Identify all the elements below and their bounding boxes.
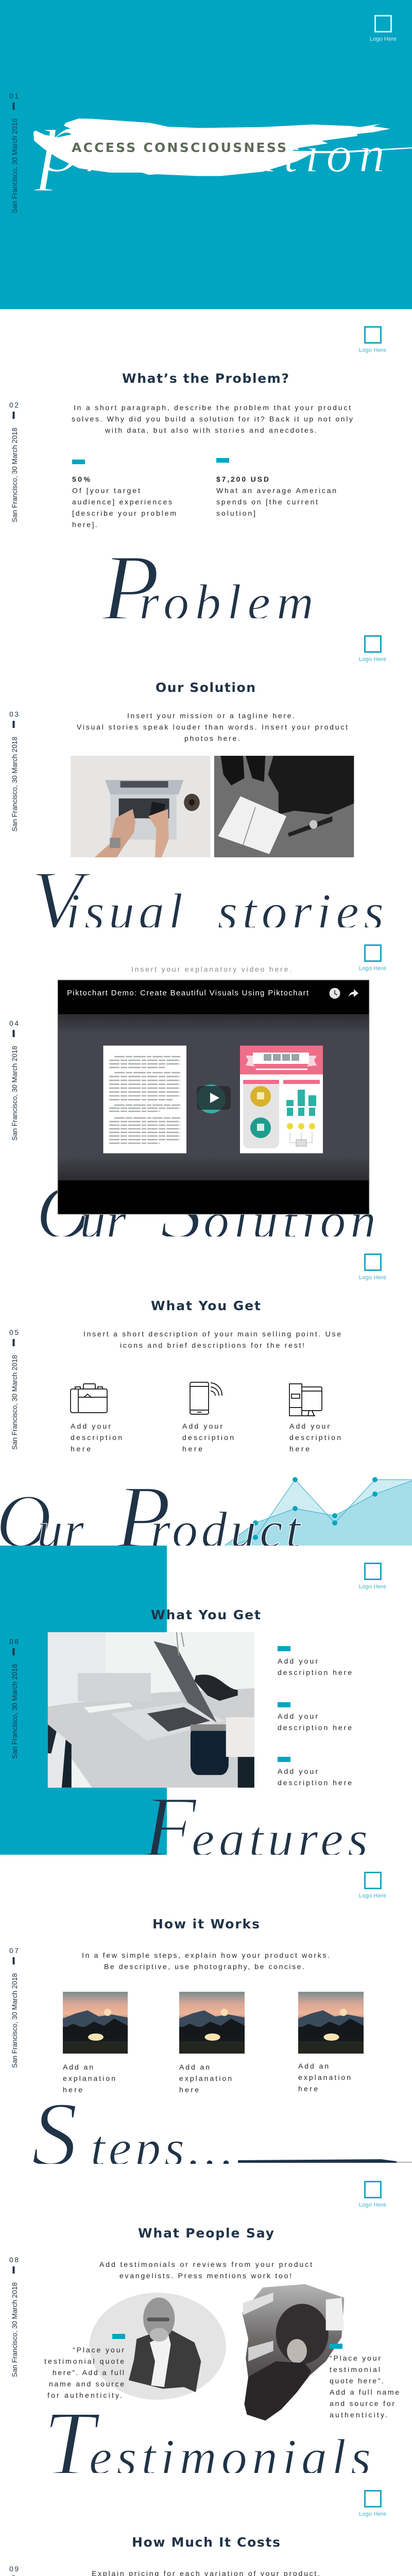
logo placeholder: Logo Here: [359, 347, 386, 353]
section marker: San Francisco, 30 March 2018: [11, 1355, 19, 1450]
stat: 50%: here].: [72, 520, 97, 529]
step 2: [179, 1992, 245, 2094]
stat: price: [216, 458, 336, 517]
step 2: here: [179, 2086, 199, 2094]
section marker: [9, 2256, 19, 2377]
icon: clock: [330, 988, 340, 998]
section marker: [9, 1328, 19, 1450]
paragraph: [72, 403, 353, 434]
list item 1: description here: [278, 1668, 352, 1676]
tagline: [77, 711, 348, 742]
heading: What People Say: [138, 2226, 274, 2241]
logo placeholder: [359, 945, 386, 972]
description columns: here: [289, 1445, 310, 1453]
heading: How Much It Costs: [132, 2535, 280, 2550]
description columns: [71, 1422, 341, 1453]
panel: how it works: [9, 1872, 412, 2185]
section marker: 01: [9, 92, 19, 100]
quote 1: testimonial quote: [44, 2357, 124, 2365]
logo placeholder: [359, 2490, 386, 2517]
step 3: here: [298, 2084, 318, 2093]
panel: solution: [9, 636, 386, 947]
description: In a few simple steps, explain how your product works.: [82, 1951, 330, 1959]
logo placeholder: [359, 327, 386, 353]
list item 1: Add your: [278, 1657, 318, 1665]
section marker: San Francisco, 30 March 2018: [11, 118, 19, 213]
description: icons and brief descriptions for the rest!: [120, 1341, 304, 1349]
heading: What You Get: [151, 1298, 261, 1313]
description columns: Add your: [289, 1422, 330, 1430]
panel: cover: [0, 0, 412, 309]
icon: desktop computer: [289, 1384, 322, 1416]
quote 1: name and source: [49, 2380, 124, 2388]
logo placeholder: Logo Here: [359, 2202, 386, 2208]
description: [83, 1330, 341, 1349]
quote 1: [44, 2334, 125, 2399]
heading: What’s the Problem?: [122, 371, 289, 386]
tagline: Insert your mission or a tagline here.: [127, 711, 295, 720]
icon: phone and signal: [190, 1382, 222, 1414]
script word: Problem: P: [101, 535, 160, 641]
video player: [58, 980, 369, 1214]
video caption: Insert your explanatory video here.: [131, 965, 291, 973]
section marker: 05: [9, 1328, 19, 1336]
photo: laptop and phone: [71, 756, 210, 857]
description columns: here: [182, 1445, 202, 1453]
list item 2: description here: [278, 1723, 352, 1732]
description columns: description: [71, 1433, 122, 1442]
section marker: 02: [9, 401, 19, 409]
tagline: photos here.: [184, 734, 240, 742]
panel: problem: [9, 327, 386, 641]
logo placeholder: Logo Here: [359, 1893, 386, 1899]
quote 1: here”. Add a full: [53, 2368, 124, 2377]
script word: Steps: S: [31, 2083, 78, 2185]
list item 2: [278, 1702, 352, 1732]
script word: Steps: teps...: [91, 2120, 234, 2177]
quote 1: for authenticity.: [47, 2391, 122, 2399]
paragraph: In a short paragraph, describe the problem that your product: [74, 403, 351, 412]
list item 2: Add your: [278, 1712, 318, 1720]
section marker: San Francisco, 30 March 2018: [11, 1664, 19, 1759]
logo placeholder: [359, 636, 386, 663]
description columns: description: [182, 1433, 234, 1442]
quote 2: and source for: [330, 2399, 394, 2408]
script word: Features: eatures: [192, 1810, 368, 1868]
script word: Testimonials: T: [43, 2392, 100, 2495]
stat: 50%: [describe your problem: [72, 509, 176, 517]
logo placeholder: Logo Here: [370, 36, 397, 42]
section marker: [9, 1019, 19, 1141]
panel: what you get photo: [0, 1546, 386, 1875]
section marker: 07: [9, 1946, 19, 1955]
section marker: 06: [9, 1637, 19, 1646]
heading: What You Get: [151, 1607, 261, 1622]
section marker: San Francisco, 30 March 2018: [11, 1973, 19, 2068]
stat: 50%: 50%: [72, 475, 91, 483]
section marker: San Francisco, 30 March 2018: [11, 737, 19, 832]
stat: price: $7,200 USD: [216, 475, 269, 483]
section marker: San Francisco, 30 March 2018: [11, 428, 19, 522]
stat: 50%: Of [your target: [72, 486, 140, 495]
portrait: woman: [242, 2284, 344, 2420]
script word: presentation: p: [33, 89, 85, 192]
video title: Piktochart Demo: Create Beautiful Visuals Using Piktochart: [67, 989, 309, 997]
description: Be descriptive, use photography, be concise.: [104, 1962, 304, 1971]
logo placeholder: [370, 15, 397, 42]
section marker: 09: [9, 2565, 19, 2573]
step 1: [63, 1992, 128, 2094]
icon: share arrow: [348, 989, 358, 997]
brush stroke: [33, 118, 412, 176]
quote 2: testimonial: [330, 2365, 380, 2374]
description: evangelists. Press mentions work too!: [119, 2272, 291, 2280]
heading: How it Works: [152, 1917, 260, 1931]
photo: shoes, bag and notebook: [214, 756, 354, 857]
logo placeholder: Logo Here: [359, 965, 386, 972]
logo placeholder: [359, 1254, 386, 1281]
list item 1: [278, 1646, 352, 1676]
description columns: here: [71, 1445, 91, 1453]
stat: price: spends on [the current: [216, 498, 318, 506]
heading: Our Solution: [156, 680, 255, 695]
quote 2: Add a full name: [330, 2388, 399, 2396]
panel: video: [9, 945, 386, 1257]
script word: Visual stories: isual: [66, 883, 183, 940]
step 3: [298, 1992, 364, 2093]
section marker: San Francisco, 30 March 2018: [11, 1046, 19, 1141]
description: Add testimonials or reviews from your product: [99, 2260, 312, 2268]
step 2: Add an: [179, 2063, 210, 2071]
logo placeholder: [359, 1563, 386, 1590]
panel: testimonials: [9, 2181, 399, 2495]
script word: Our Solution: ur: [80, 1192, 127, 1249]
paragraph: solves. Why did you build a solution for it? Back it up not only: [72, 415, 353, 423]
stat: price: solution]: [216, 509, 255, 517]
logo placeholder: Logo Here: [359, 656, 386, 663]
description columns: description: [289, 1433, 341, 1442]
step 1: Add an: [63, 2063, 93, 2071]
script word: Our Solution: O: [36, 1170, 92, 1255]
quote 2: authenticity.: [330, 2411, 387, 2419]
script word: Features: F: [143, 1778, 198, 1875]
script word: Steps: [33, 2105, 412, 2164]
description columns: Add your: [182, 1422, 222, 1430]
panel: what you get icons: [0, 1254, 412, 1567]
stat: 50%: [72, 460, 176, 529]
script word: Our Solution: S: [160, 1162, 203, 1257]
section marker: San Francisco, 30 March 2018: [11, 2282, 19, 2377]
quote 2: “Place your: [330, 2354, 381, 2362]
step 3: Add an: [298, 2062, 329, 2070]
logo placeholder: [359, 1872, 386, 1899]
step 3: explanation: [298, 2073, 351, 2081]
icon: briefcase: [71, 1384, 107, 1413]
logo placeholder: Logo Here: [359, 2511, 386, 2517]
photo: desk with laptop: [48, 1632, 254, 1788]
stat: 50%: audience] experiences: [72, 498, 172, 506]
infographic thumbnail: [240, 1046, 323, 1153]
section marker: 04: [9, 1019, 19, 1027]
quote 1: “Place your: [73, 2346, 124, 2354]
step 1: here: [63, 2086, 82, 2094]
tagline: Visual stories speak louder than words. Insert your product: [77, 723, 348, 731]
script word: Our Product: ur: [37, 1501, 84, 1558]
title: ACCESS CONSCIOUSNESS: [72, 140, 286, 155]
section marker: [9, 710, 19, 832]
stat: price: What an average American: [216, 486, 336, 495]
logo placeholder: [359, 2181, 386, 2208]
section marker: [9, 1946, 19, 2068]
section marker: 08: [9, 2256, 19, 2264]
list item 3: [278, 1757, 352, 1787]
section marker: 03: [9, 710, 19, 718]
script word: Our Product: P: [115, 1467, 171, 1567]
area chart: [225, 1477, 412, 1546]
script word: Visual stories: V: [31, 853, 91, 947]
panel: pricing: [0, 2490, 412, 2576]
logo placeholder: Logo Here: [359, 1275, 386, 1281]
description: Insert a short description of your main selling point. Use: [83, 1330, 341, 1338]
section marker: [9, 401, 19, 522]
section marker: [9, 1637, 19, 1759]
section marker: [9, 92, 19, 213]
script word: Our Product: roduct: [150, 1501, 301, 1558]
script word: Visual stories: stories: [200, 883, 384, 940]
script word: Our Solution: olution: [203, 1192, 376, 1249]
document thumbnail: [103, 1046, 186, 1153]
list item 3: description here: [278, 1778, 352, 1787]
script word: presentation: resentation: [85, 126, 385, 183]
description: [99, 2260, 312, 2280]
portrait: man: [89, 2293, 226, 2400]
step 1: explanation: [63, 2074, 115, 2082]
paragraph: with data, but also with stories and anecdotes.: [105, 426, 317, 434]
play button: [197, 1084, 231, 1113]
step 2: explanation: [179, 2074, 232, 2082]
quote 2: quote here”.: [330, 2377, 384, 2385]
description columns: Add your: [71, 1422, 111, 1430]
quote 2: [329, 2344, 399, 2419]
script word: Problem: roblem: [139, 574, 314, 631]
logo placeholder: Logo Here: [359, 1584, 386, 1590]
script word: Testimonials: estimonials: [89, 2429, 371, 2486]
list item 3: Add your: [278, 1767, 318, 1775]
description: [82, 1951, 330, 1971]
